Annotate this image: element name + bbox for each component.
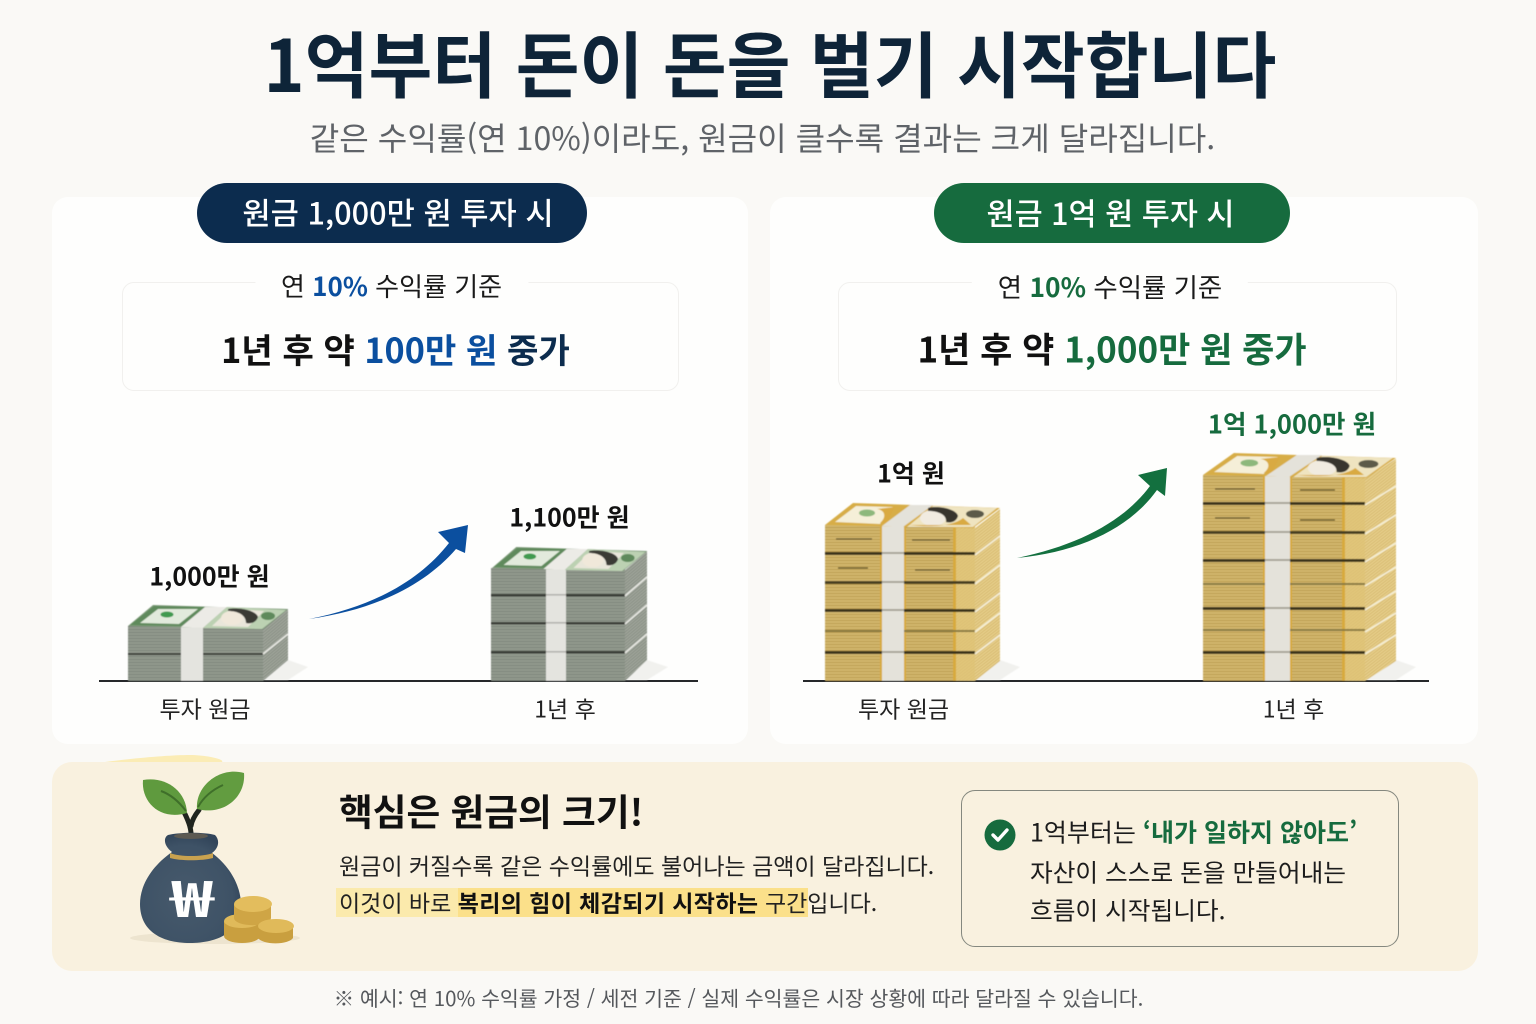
panel: left 1,000만 원 card: [52, 197, 748, 744]
baseline left: [99, 680, 698, 682]
callout line 1: 1억부터는 ‘내가 일하지 않아도’: [1030, 814, 1357, 850]
callout line 3: 흐름이 시작됩니다.: [1030, 892, 1226, 928]
title: 1억부터 돈이 돈을 벌기 시작합니다: [264, 8, 1276, 113]
money stack: 1억 원: [825, 503, 1020, 681]
key message line 1: 원금이 커질수록 같은 수익률에도 불어나는 금액이 달라집니다.: [339, 848, 934, 882]
money stack: 1,000만 원: [128, 605, 308, 681]
right pill heading: [934, 183, 1290, 243]
value label: 1억 원: 1억 원: [877, 454, 945, 490]
value label: 1,000만 원: 1,000만 원: [149, 558, 270, 594]
right result text: 1년 후 약 1,000만 원 중가: [917, 322, 1307, 374]
baseline right: [803, 680, 1429, 682]
axis label: 1년 후 left: 1년 후: [534, 690, 596, 724]
left pill text: 원금 1,000만 원 투자 시: [242, 189, 554, 234]
left rate label: [255, 273, 528, 299]
highlight pale: [336, 888, 458, 917]
callout box: [961, 790, 1399, 947]
panel: right 1억 원 card: [770, 197, 1478, 744]
right rate label: 연 10% 수익률 기준: [998, 266, 1222, 305]
value label: 1,100만 원: 1,100만 원: [509, 498, 630, 534]
callout line 2: 자산이 스스로 돈을 만들어내는: [1030, 854, 1346, 890]
key message line 2: 이것이 바로 복리의 힘이 체감되기 시작하는 구간입니다.: [339, 884, 877, 918]
subtitle: 같은 수익률(연 10%)이라도, 원금이 클수록 결과는 크게 달라집니다.: [310, 114, 1215, 160]
left result text: 1년 후 약 100만 원 중가: [221, 323, 570, 373]
money stack: 1억 1,000만 원: [1203, 453, 1416, 681]
footnote: ※ 예시: 연 10% 수익률 가정 / 세전 기준 / 실제 수익률은 시장 상황에 따라 달라질 수 있습니다.: [334, 982, 1143, 1012]
highlight strong: [458, 888, 808, 917]
arrow: blue growth: [309, 525, 468, 619]
right result box: [838, 282, 1397, 391]
arrow: green growth: [1017, 468, 1167, 558]
axis label: 1년 후 right: 1년 후: [1263, 690, 1324, 724]
value label: 1억 1,000만 원: 1억 1,000만 원: [1208, 404, 1376, 441]
left pill heading: [197, 183, 587, 243]
left rate label: 연 10% 수익률 기준: [281, 267, 502, 304]
icon: money bag with sprout: ₩: [168, 859, 215, 931]
axis label: 투자 원금 left: 투자 원금: [159, 690, 251, 724]
key message heading: 핵심은 원금의 크기!: [339, 783, 643, 837]
money stack: 1,100만 원: [491, 547, 668, 681]
glow above bottom panel: [105, 755, 222, 762]
left result box: [122, 282, 679, 391]
right rate label: [972, 273, 1248, 299]
panel: bottom key message: [52, 762, 1478, 971]
icon: money bag with sprout: [130, 772, 300, 944]
right pill text: 원금 1억 원 투자 시: [987, 190, 1234, 234]
icon: check badge: [984, 820, 1016, 850]
axis label: 투자 원금 right: 투자 원금: [858, 690, 949, 724]
